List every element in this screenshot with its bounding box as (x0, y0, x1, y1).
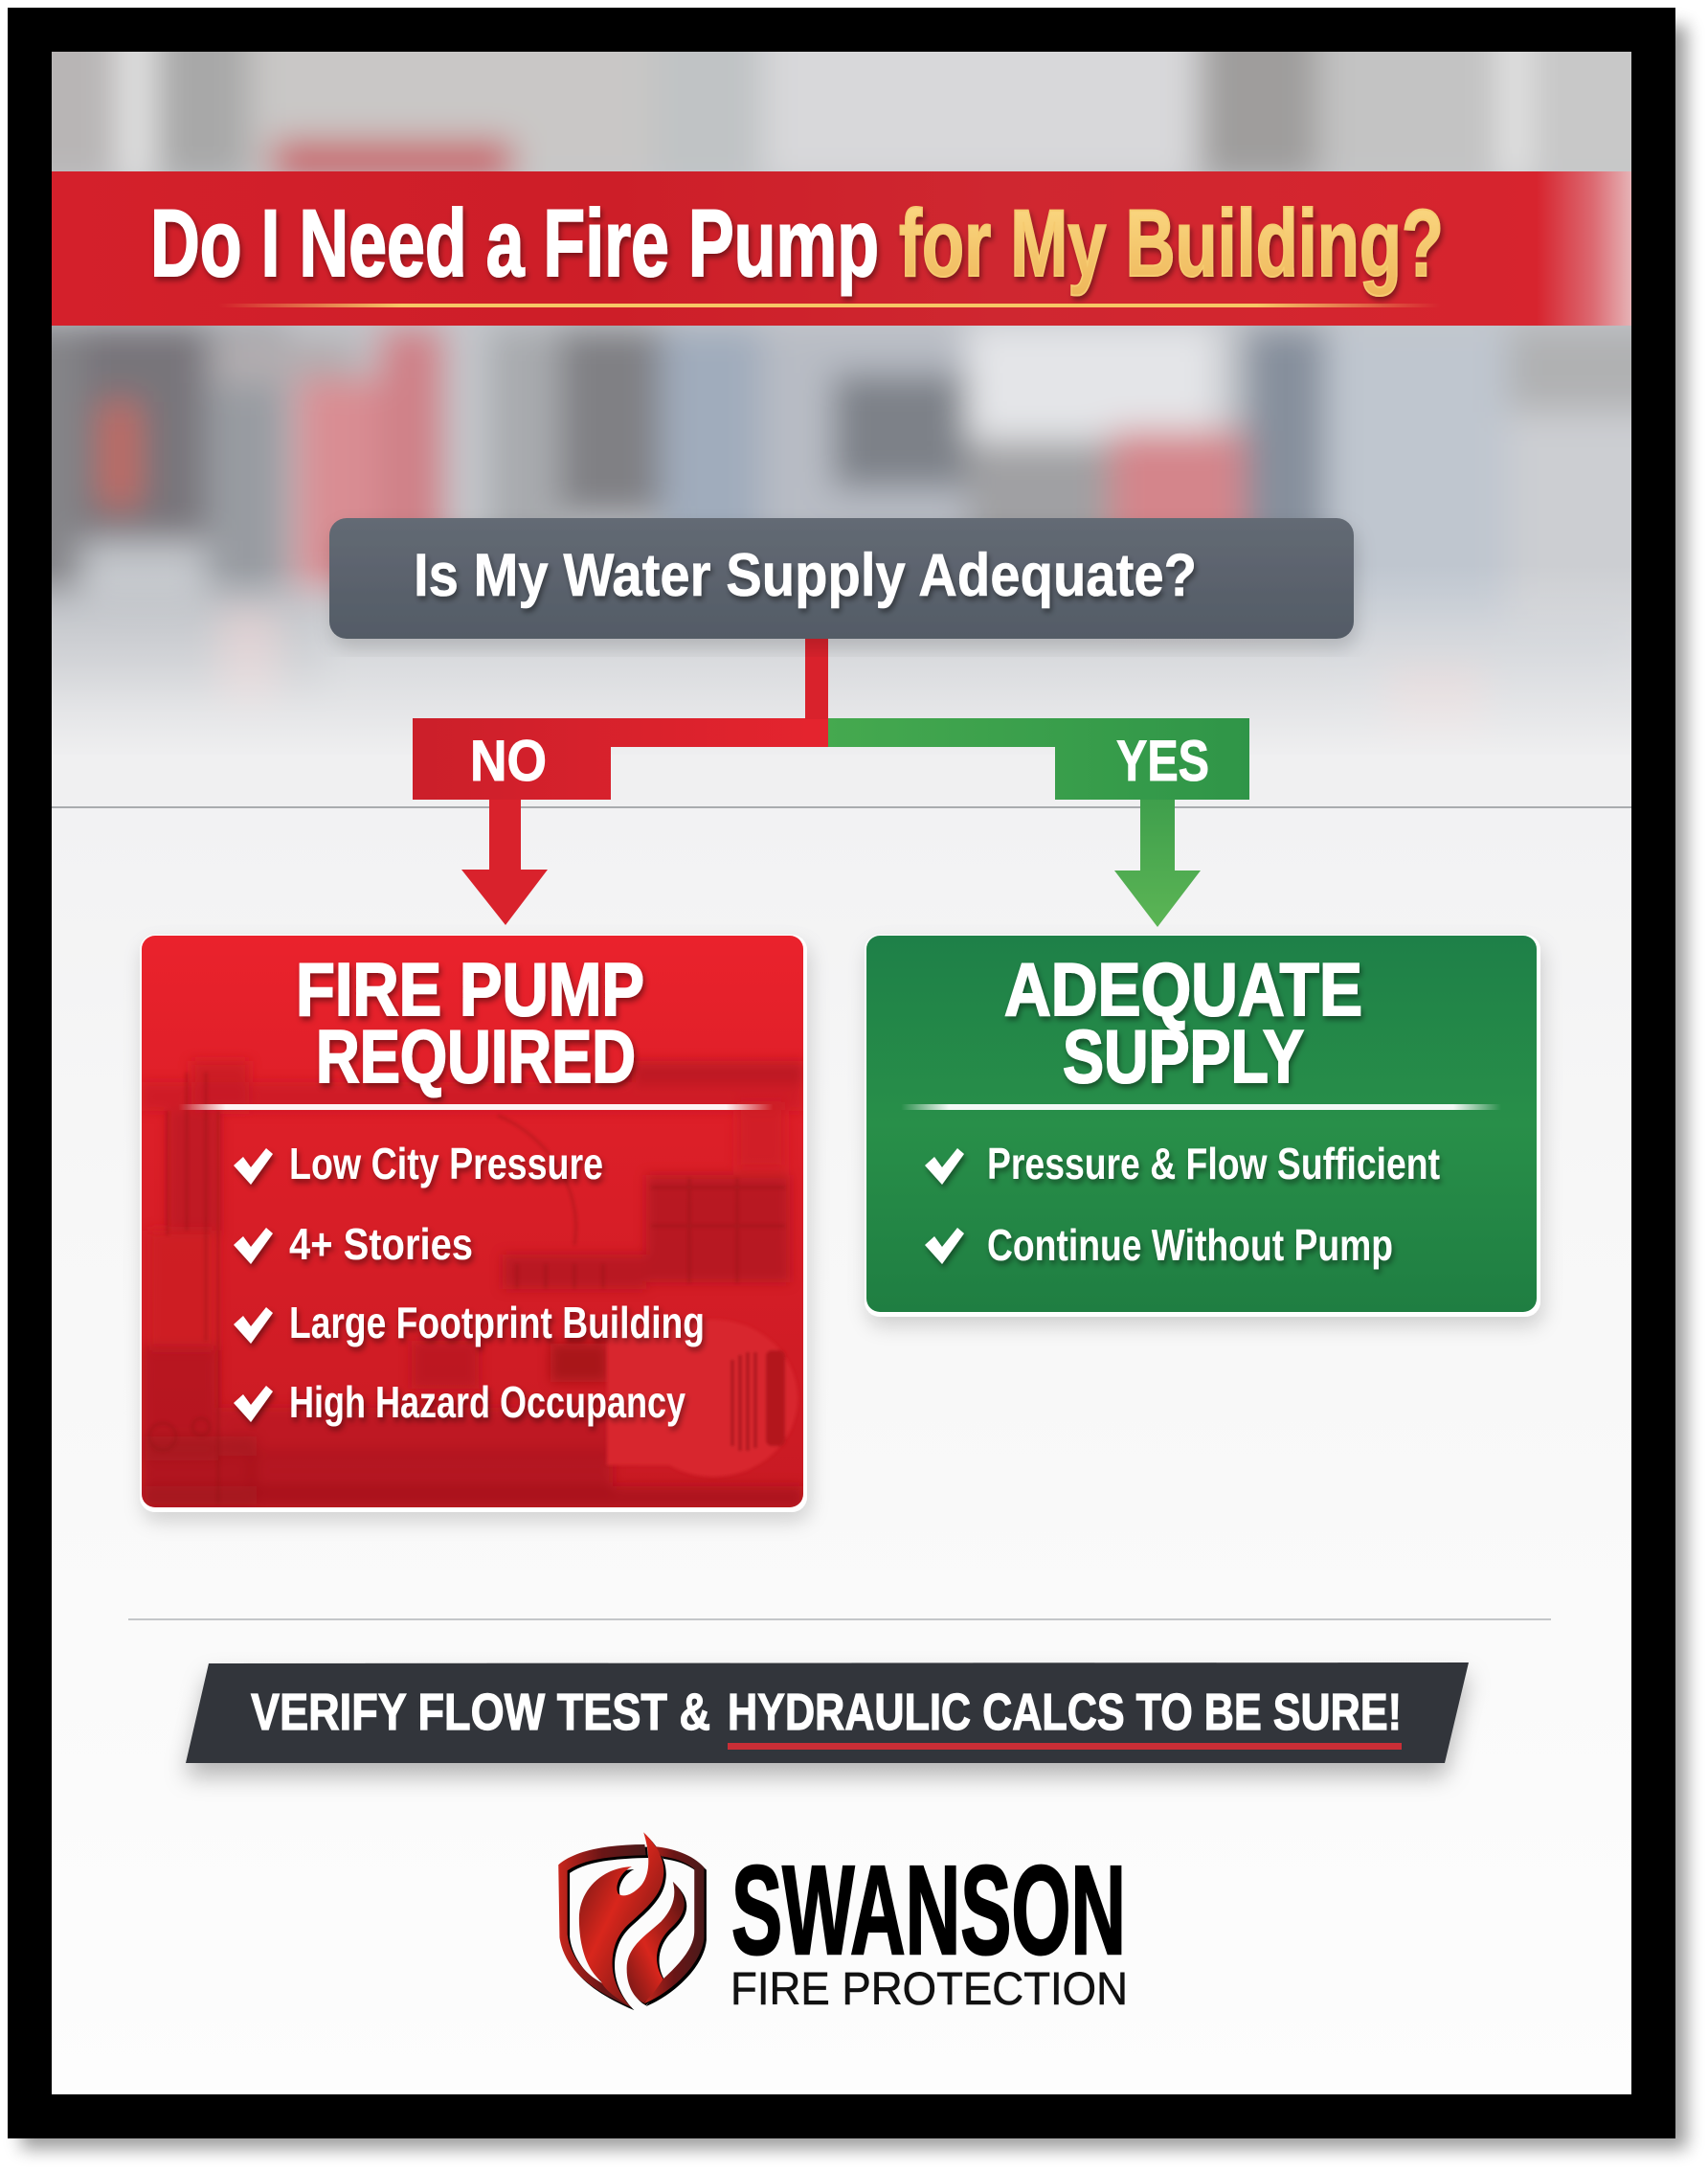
callout text: VERIFY FLOW TEST & (251, 1684, 710, 1741)
title text: Do I Need a Fire Pump (150, 190, 879, 296)
YES label: YES (1116, 729, 1209, 793)
arrow: YES (1114, 800, 1201, 927)
logo: Swanson Fire Protection (558, 1832, 1128, 2015)
wordmark: SWANSON (731, 1840, 1126, 1980)
panel: fire pump required (140, 935, 807, 1512)
motor (607, 1320, 798, 1477)
callout banner (186, 1662, 1469, 1763)
panel title: ADEQUATE (1004, 947, 1362, 1031)
callout text: HYDRAULIC CALCS TO BE SURE! (728, 1684, 1402, 1741)
question box (329, 518, 1354, 639)
item: 4+ Stories (234, 1219, 473, 1269)
footer divider line (128, 1618, 1551, 1620)
callout underline (728, 1743, 1402, 1750)
checklist (925, 1139, 1440, 1270)
title banner (52, 171, 1631, 326)
machinery lines (148, 1073, 784, 1438)
panel divider (901, 1104, 1501, 1110)
arrow: NO (461, 800, 548, 925)
tagline: FIRE PROTECTION (730, 1964, 1128, 2015)
item: Large Footprint Building: Large Footprint Building (289, 1298, 705, 1347)
callout text (251, 1684, 1402, 1741)
panel machinery photo overlay (142, 1061, 804, 1509)
panel title: SUPPLY (1063, 1014, 1304, 1098)
gold rule (218, 304, 1440, 307)
connector: NO branch (413, 638, 828, 800)
connector: YES branch (828, 718, 1249, 800)
panel title (1004, 947, 1362, 1098)
item: Low City Pressure: Low City Pressure (289, 1139, 603, 1188)
NO label: NO (470, 729, 547, 793)
item: 4+ Stories: 4+ Stories (289, 1219, 473, 1269)
checklist (234, 1139, 705, 1427)
item: Pressure and Flow Sufficient: Pressure & Flow Sufficient (987, 1139, 1440, 1188)
panel title (296, 947, 644, 1098)
panel: adequate supply (865, 935, 1540, 1317)
item: High Hazard Occupancy: High Hazard Occupancy (289, 1377, 685, 1427)
question text: Is My Water Supply Adequate? (414, 542, 1197, 609)
icon: flame shield (558, 1832, 707, 2010)
item: Continue Without Pump: Continue Without Pump (987, 1220, 1393, 1270)
title text: for My Building? (899, 190, 1444, 296)
panel divider (178, 1104, 774, 1110)
panel title: REQUIRED (316, 1014, 636, 1098)
panel title: FIRE PUMP (296, 947, 644, 1031)
